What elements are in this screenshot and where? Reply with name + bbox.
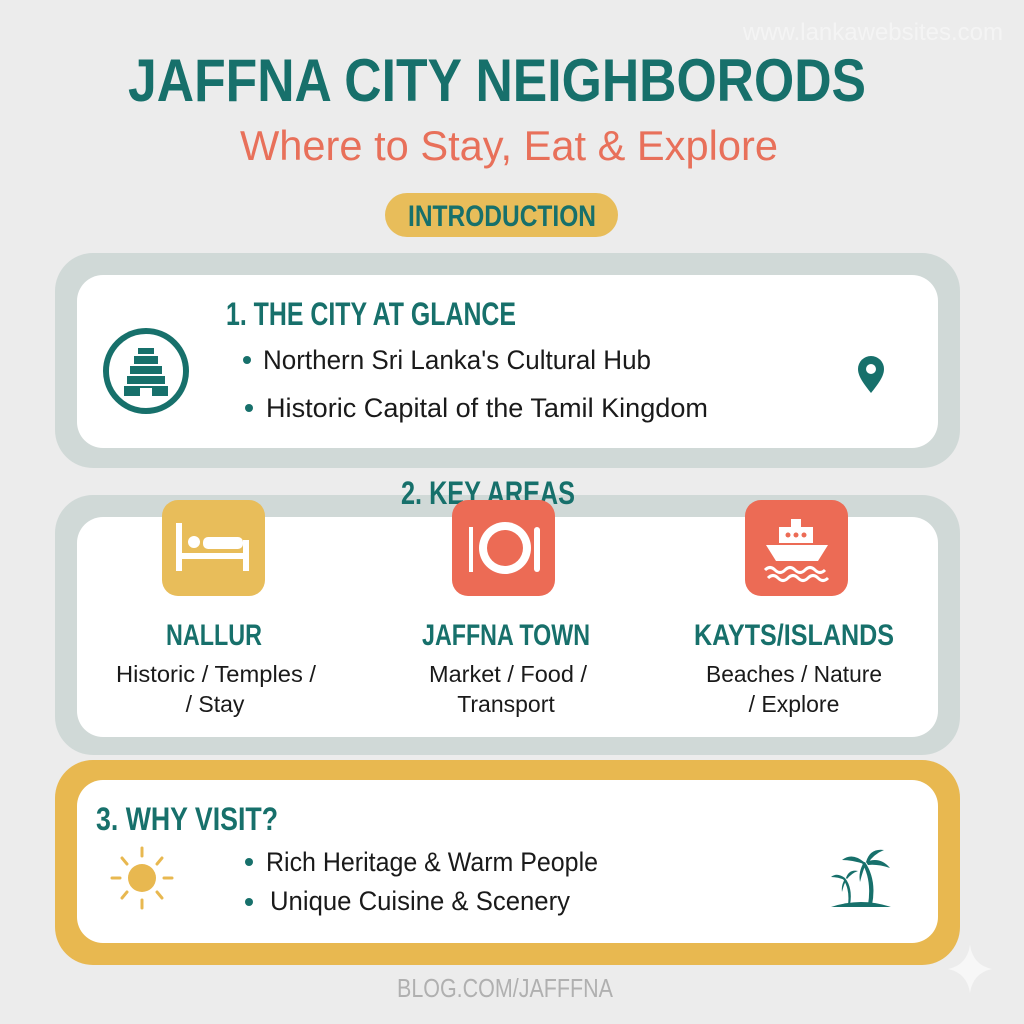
area: nallur: NALLUR (166, 619, 262, 652)
area: jaffna town: Transport (457, 691, 555, 717)
bullets 1: Historic Capital of the Tamil Kingdom (266, 393, 708, 423)
bullets 1 (243, 345, 708, 423)
icon: bed (162, 500, 265, 596)
panel: city at glance (55, 253, 960, 468)
area: kayts: / Explore (749, 691, 839, 717)
icon: location pin (858, 356, 884, 393)
area: jaffna town: Market / Food / (429, 661, 588, 687)
subtitle: Where to Stay, Eat & Explore (240, 122, 778, 169)
icon: sun (112, 848, 172, 908)
area: kayts (694, 619, 894, 717)
icon: plate (452, 500, 555, 596)
area: nallur (116, 619, 317, 717)
area: jaffna town (422, 619, 590, 717)
panel: key areas (55, 475, 960, 755)
heading 2: 2. KEY AREAS (401, 475, 575, 511)
watermark: www.lankawebsites.com (742, 19, 1003, 46)
intro pill (385, 193, 618, 237)
area: kayts: Beaches / Nature (706, 661, 882, 687)
area: nallur: Historic / Temples / (116, 661, 317, 687)
bullets 1: Northern Sri Lanka's Cultural Hub (263, 345, 651, 375)
heading 1: 1. THE CITY AT GLANCE (226, 296, 516, 332)
title: JAFFNA CITY NEIGHBORODS (128, 47, 866, 114)
icon: temple (106, 331, 186, 411)
heading 3: 3. WHY VISIT? (96, 801, 278, 837)
icon: sparkle (948, 945, 992, 993)
area: jaffna town: JAFFNA TOWN (422, 619, 590, 652)
icon: palm trees (831, 850, 891, 907)
bullets 3: Rich Heritage & Warm People (266, 847, 598, 877)
bullets 3 (245, 847, 598, 916)
area: nallur: / Stay (186, 691, 245, 717)
footer url: BLOG.COM/JAFFFNA (397, 973, 614, 1003)
area: kayts: KAYTS/ISLANDS (694, 619, 894, 652)
bullets 3: Unique Cuisine & Scenery (270, 886, 570, 916)
panel: why visit (55, 760, 960, 965)
intro pill: INTRODUCTION (408, 200, 596, 233)
icon: boat (745, 500, 848, 596)
